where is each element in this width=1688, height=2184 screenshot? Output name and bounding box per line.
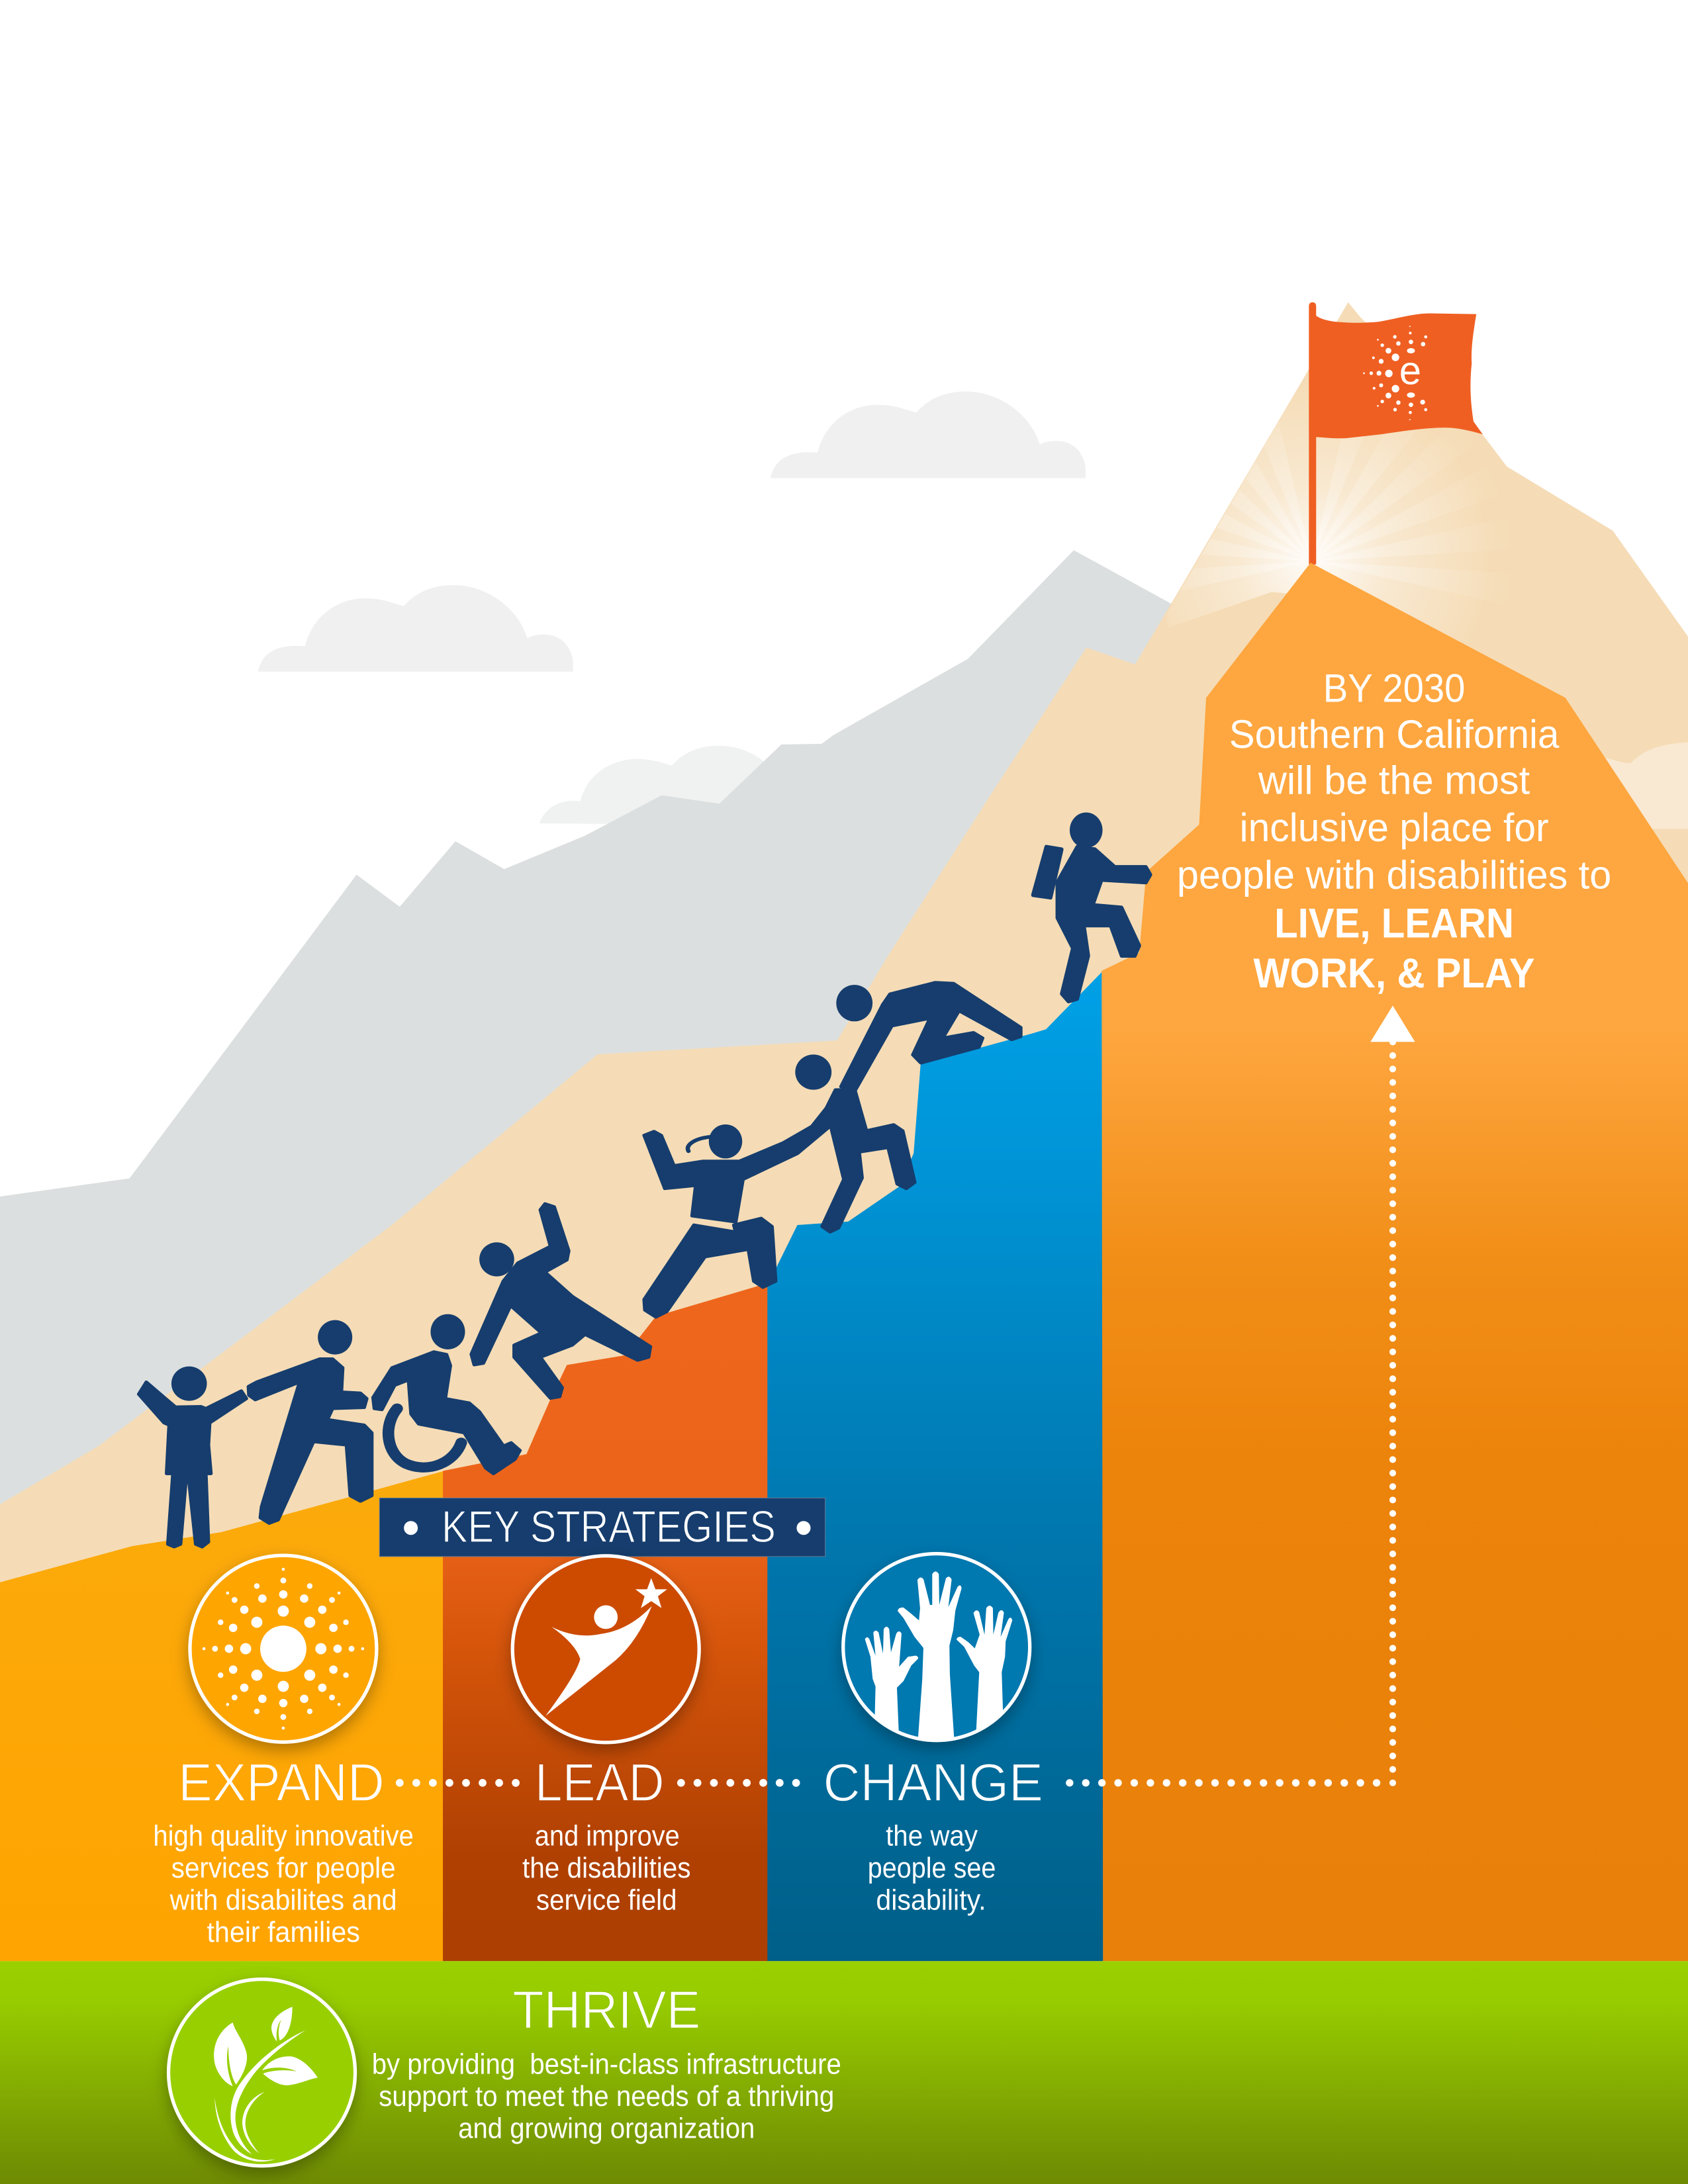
- flag pole: [1309, 302, 1316, 565]
- dotted connector: lead to change: [681, 1781, 798, 1785]
- tan mountain with summit: [0, 302, 1688, 1961]
- green thrive band: [0, 1961, 1688, 2184]
- climber: adult reaching back: [248, 1320, 372, 1524]
- climber: leaping figure: [471, 1204, 650, 1398]
- climber: top helper on ledge: [836, 983, 1021, 1090]
- vision statement: [1177, 666, 1611, 997]
- flag on summit: [1309, 302, 1483, 565]
- key strategies banner: KEY STRATEGIES: [442, 1502, 776, 1552]
- vision statement: will be the most: [1258, 758, 1530, 803]
- dotted arrow: change up to vision: [1070, 1006, 1415, 1783]
- heading: change: CHANGE: [823, 1753, 1043, 1813]
- column: yellow expand: [0, 1471, 444, 1961]
- vision statement: inclusive place for: [1240, 805, 1549, 850]
- text: change description: the way: [886, 1821, 978, 1852]
- background mountain: gray: [0, 550, 1197, 1672]
- vision statement: LIVE, LEARN: [1274, 900, 1514, 946]
- cloud: right behind summit: [1573, 743, 1688, 829]
- icon: expand sun: [190, 1555, 377, 1742]
- flag logo: [1363, 326, 1427, 420]
- climber: man reaching up: [795, 1054, 915, 1232]
- text: expand description: [153, 1821, 414, 1948]
- cloud: left: [258, 585, 573, 672]
- climber: child with arms raised: [139, 1367, 246, 1547]
- flag cloth: [1315, 314, 1483, 438]
- text: thrive description: and growing organization: [458, 2113, 755, 2145]
- heading: expand: EXPAND: [178, 1753, 385, 1813]
- text: lead description: and improve: [535, 1821, 680, 1852]
- column: blue change: [767, 971, 1103, 1961]
- icon: raised hands: [843, 1554, 1030, 1741]
- text: expand description: their families: [207, 1917, 360, 1948]
- text: expand description: services for people: [171, 1852, 396, 1884]
- dotted connector: expand to lead: [400, 1781, 517, 1785]
- text: thrive description: by providing best-in-class infrastructure: [372, 2049, 841, 2081]
- text: expand description: with disabilites and: [169, 1884, 397, 1916]
- summit sun rays: [1172, 414, 1479, 631]
- flag logo: e: [1399, 349, 1421, 393]
- icon: lead figure with star: [512, 1556, 699, 1743]
- text: thrive description: support to meet the needs of a thriving: [379, 2081, 834, 2113]
- climber: woman with ponytail: [644, 1108, 830, 1317]
- vision statement: WORK, & PLAY: [1254, 950, 1535, 997]
- text: thrive description: [372, 2049, 841, 2145]
- heading: lead: LEAD: [535, 1753, 665, 1813]
- vision statement: Southern California: [1229, 712, 1560, 756]
- text: lead description: the disabilities: [522, 1852, 691, 1884]
- vision statement: BY 2030: [1323, 666, 1465, 711]
- text: change description: people see: [868, 1852, 996, 1884]
- climber: wheelchair user: [373, 1314, 520, 1474]
- cloud: upper right: [771, 391, 1086, 478]
- text: change description: [868, 1821, 996, 1916]
- heading: thrive: THRIVE: [512, 1980, 700, 2040]
- icon: thrive plant: [169, 1979, 355, 2166]
- text: change description: disability.: [876, 1884, 986, 1916]
- tan foothill in front of rays: [1135, 592, 1316, 724]
- climber: hiker with backpack: [1033, 813, 1150, 1001]
- text: expand description: high quality innovative: [153, 1821, 414, 1852]
- main orange summit mountain: [1102, 563, 1688, 1961]
- cloud: behind mountains: [539, 746, 763, 825]
- text: lead description: service field: [536, 1884, 677, 1916]
- text: lead description: [522, 1821, 691, 1916]
- column: orange lead: [443, 1283, 769, 1961]
- vision statement: people with disabilities to: [1177, 853, 1611, 897]
